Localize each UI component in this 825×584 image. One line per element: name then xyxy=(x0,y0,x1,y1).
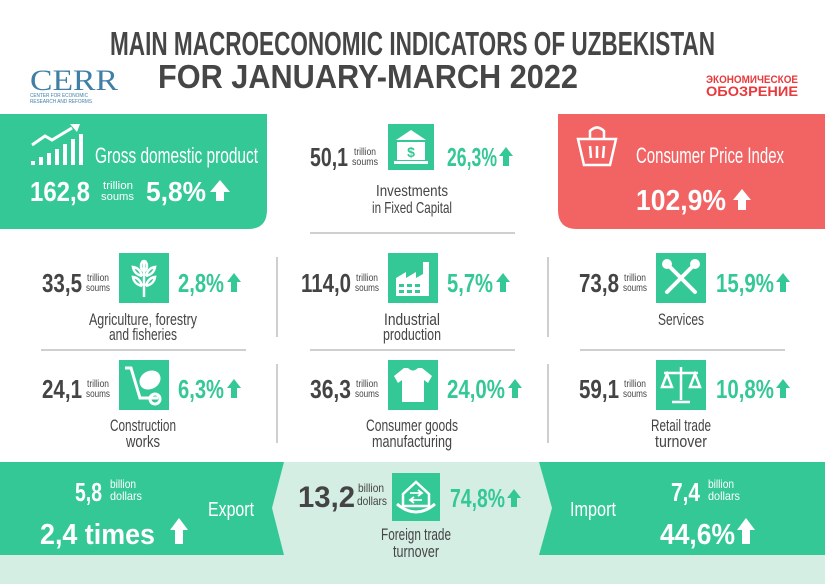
block: investments: Investments xyxy=(376,183,448,200)
block: construction: 24,1 xyxy=(42,374,82,404)
block: foreign trade: turnover xyxy=(393,542,439,561)
panel: import: 7,4 xyxy=(671,477,700,507)
block: investments xyxy=(310,124,513,217)
block: consumer goods: Consumer goods xyxy=(366,416,458,435)
block: consumer goods: 24,0% xyxy=(447,374,505,404)
block: industrial: soums xyxy=(355,283,379,294)
block: investments: in Fixed Capital xyxy=(372,200,452,217)
icon: growth chart xyxy=(31,124,83,165)
icon: trade house xyxy=(392,473,440,521)
block: construction: soums xyxy=(86,389,110,400)
icon: tools xyxy=(656,253,706,303)
block: investments: trillion xyxy=(354,147,376,158)
icon: t-shirt xyxy=(388,360,438,410)
block: foreign trade: Foreign trade xyxy=(381,525,451,544)
logo: Economic review xyxy=(706,74,798,99)
block: industrial: 5,7% xyxy=(447,268,493,298)
block: construction: works xyxy=(125,432,160,451)
panel: CPI xyxy=(558,114,825,229)
block: retail: soums xyxy=(623,389,647,400)
panel: GDP xyxy=(0,114,267,229)
block: services: trillion xyxy=(624,273,646,284)
block: services: 73,8 xyxy=(579,268,619,298)
block: industrial: production xyxy=(383,325,441,344)
panel: export: dollars xyxy=(110,489,142,503)
logo: CERR: RESEARCH AND REFORMS xyxy=(30,99,93,105)
icon: scales xyxy=(656,360,706,410)
block: retail: 10,8% xyxy=(716,374,774,404)
block: agriculture: 2,8% xyxy=(178,268,224,298)
logo: Economic review: ЭКОНОМИЧЕСКОЕ xyxy=(706,74,798,86)
block: agriculture: Agriculture, forestry xyxy=(89,310,197,329)
title xyxy=(110,25,715,95)
panel: export: 2,4 times xyxy=(40,519,155,551)
block: consumer goods xyxy=(310,360,522,451)
panel: import: 44,6% xyxy=(660,519,735,551)
icon: factory xyxy=(388,253,438,303)
icon: bank xyxy=(388,124,434,170)
panel: import: Import xyxy=(570,499,616,521)
panel: import xyxy=(539,462,825,555)
block: industrial: Industrial xyxy=(384,310,440,329)
block: retail: turnover xyxy=(655,432,707,451)
block: investments: 26,3% xyxy=(447,142,497,172)
panel: export xyxy=(0,462,284,555)
block: construction: trillion xyxy=(87,379,109,390)
block: consumer goods: 36,3 xyxy=(310,374,351,404)
block: foreign trade: billion xyxy=(358,481,384,495)
block: services: Services xyxy=(658,310,704,329)
block: agriculture xyxy=(42,253,241,344)
title: FOR JANUARY-MARCH 2022 xyxy=(158,58,578,95)
icon: concrete mixer xyxy=(119,360,169,410)
panel: CPI: 102,9% xyxy=(636,185,726,217)
block: industrial: trillion xyxy=(356,273,378,284)
block: retail xyxy=(579,360,790,451)
panel: import: dollars xyxy=(708,489,740,503)
panel: GDP: 5,8% xyxy=(146,176,206,207)
block: construction: Construction xyxy=(110,416,176,435)
icon: wheat xyxy=(119,253,169,303)
panel: GDP: soums xyxy=(101,191,135,203)
panel: GDP: 162,8 xyxy=(30,176,90,207)
panel: export: 5,8 xyxy=(75,477,102,507)
block: industrial xyxy=(301,253,510,344)
block: foreign trade: dollars xyxy=(357,494,387,508)
block: consumer goods: manufacturing xyxy=(372,432,452,451)
block: foreign trade: 74,8% xyxy=(450,483,505,513)
block: retail: Retail trade xyxy=(651,416,711,435)
logo: Economic review: ОБОЗРЕНИЕ xyxy=(706,83,798,99)
panel: export: Export xyxy=(208,499,254,521)
block: services xyxy=(579,253,790,329)
block: construction: 6,3% xyxy=(178,374,224,404)
bottom band xyxy=(0,462,825,584)
block: agriculture: soums xyxy=(86,283,110,294)
block: industrial: 114,0 xyxy=(301,268,351,298)
block: foreign trade: 13,2 xyxy=(298,481,355,514)
icon: bank: $ xyxy=(407,144,415,160)
block: agriculture: trillion xyxy=(87,273,109,284)
block: investments: 50,1 xyxy=(310,142,348,172)
panel: GDP: trillion xyxy=(103,180,133,192)
block: consumer goods: soums xyxy=(355,389,379,400)
block: consumer goods: trillion xyxy=(356,379,378,390)
panel: import: billion xyxy=(708,477,734,491)
icon: basket xyxy=(578,128,616,165)
logo: CERR: CERR xyxy=(30,64,118,97)
block: construction xyxy=(42,360,241,451)
panel: GDP: Gross domestic product xyxy=(95,143,258,168)
logo: CERR: CENTER FOR ECONOMIC xyxy=(30,93,88,99)
panel: export: billion xyxy=(110,477,136,491)
block: investments: soums xyxy=(352,157,378,168)
block: foreign trade xyxy=(298,473,521,561)
block: agriculture: 33,5 xyxy=(42,268,82,298)
block: retail: 59,1 xyxy=(579,374,619,404)
block: services: soums xyxy=(623,283,647,294)
block: agriculture: and fisheries xyxy=(109,325,177,344)
block: services: 15,9% xyxy=(716,268,774,298)
block: retail: trillion xyxy=(624,379,646,390)
